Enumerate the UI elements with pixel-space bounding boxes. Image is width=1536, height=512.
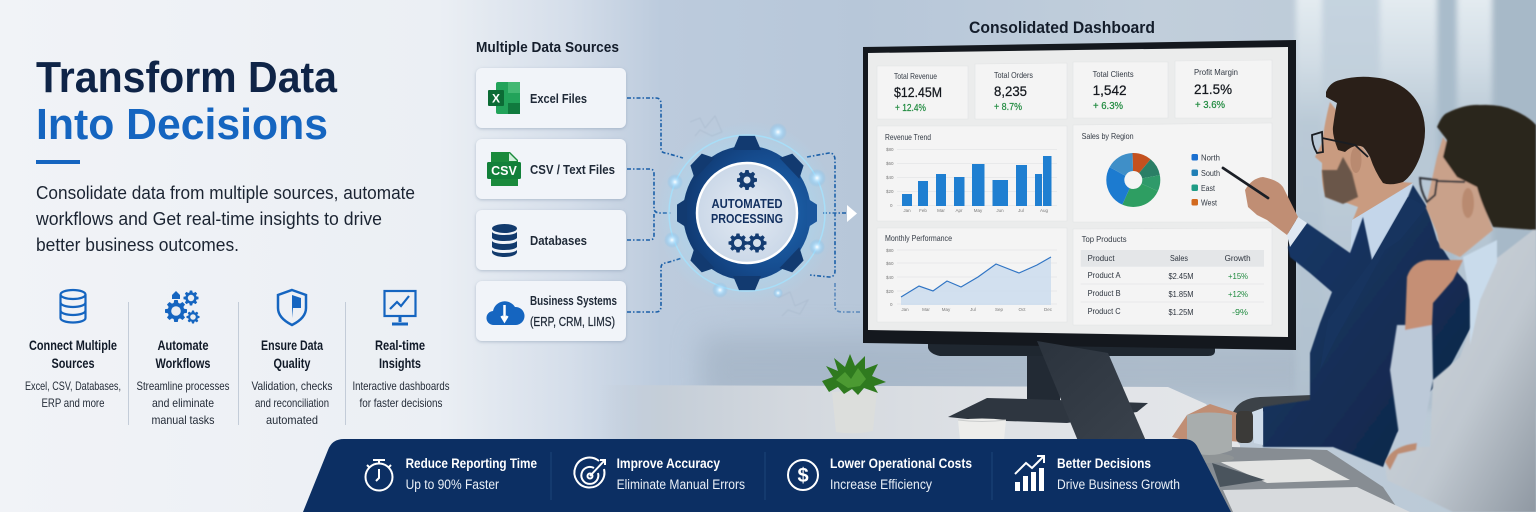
label: CSV / Text Files (530, 162, 615, 177)
coffee mug (1182, 412, 1234, 463)
ear (1350, 147, 1362, 173)
icon: database stack (492, 224, 517, 257)
main title (36, 53, 337, 149)
heading: consolidated dashboard: Consolidated Dashboard (969, 18, 1155, 37)
icon: database (60, 290, 86, 322)
benefit: better decisions: Drive Business Growth (1057, 477, 1180, 492)
feature: real-time insights (352, 291, 450, 410)
kpi: total revenue: Total Revenue (894, 71, 937, 81)
heading (261, 337, 323, 371)
benefit: better decisions: Better Decisions (1057, 455, 1151, 471)
gear label: AUTOMATED (712, 196, 782, 211)
kpi: profit margin: + 3.6% (1195, 100, 1225, 111)
bar chart: Apr (955, 208, 963, 213)
kpi: total orders: + 8.7% (994, 102, 1022, 113)
line chart: Oct (1018, 307, 1026, 312)
description: and reconciliation (255, 396, 329, 410)
heading (375, 337, 425, 371)
bar chart: Jan (903, 208, 911, 213)
description: ERP and more (42, 396, 105, 410)
title accent rule (36, 160, 80, 164)
bar chart: May (974, 208, 983, 213)
panel: business systems (476, 281, 626, 341)
benefit: improve accuracy (574, 455, 745, 492)
bar chart: Feb (919, 208, 927, 213)
chart legend (1192, 154, 1220, 208)
intro paragraph: better business outcomes. (36, 235, 239, 255)
lapel (1320, 197, 1427, 370)
icon: growth chart (1015, 456, 1044, 491)
icon: excel: X (492, 92, 500, 106)
table: Sales (1170, 254, 1188, 263)
line chart: Dec (1044, 307, 1053, 312)
description: Excel, CSV, Databases, (25, 379, 121, 393)
desk (600, 385, 1410, 512)
kpi: total clients (1073, 62, 1168, 118)
table: +12% (1228, 290, 1248, 299)
panel: sales by region: Sales by Region (1082, 131, 1134, 141)
hair (1437, 105, 1536, 230)
intro paragraph (35, 183, 415, 255)
kpi: profit margin (1175, 60, 1272, 118)
line chart: Mar (922, 307, 930, 312)
icon: shield (278, 290, 306, 325)
monitor stand (928, 343, 1215, 423)
connectors: sources to gear (627, 98, 683, 312)
icon: dollar: $ (797, 465, 809, 487)
feature: ensure data quality (252, 290, 332, 427)
description (25, 379, 121, 410)
panel: monthly performance: Monthly Performance (885, 233, 952, 243)
icon: monitor chart (384, 291, 416, 324)
table: $1.25M (1168, 308, 1194, 317)
line chart: Jul (970, 307, 976, 312)
table: Growth (1225, 254, 1251, 263)
feature: automate workflows (136, 290, 230, 427)
chart legend: South (1201, 169, 1220, 178)
gear label: PROCESSING (711, 211, 783, 226)
description: Validation, checks (252, 379, 332, 393)
icon: target (574, 458, 605, 488)
panel: revenue trend: Revenue Trend (885, 132, 931, 142)
table: Product B (1088, 289, 1121, 298)
description: Streamline processes (136, 379, 230, 393)
table: $2.45M (1168, 272, 1194, 281)
heading: Sources (52, 355, 95, 371)
description: and eliminate (152, 396, 214, 410)
heading: Automate (158, 337, 209, 353)
kpi: total orders: Total Orders (994, 70, 1033, 80)
intro paragraph: Consolidate data from multiple sources, automate (36, 183, 415, 203)
gear hub (697, 163, 797, 263)
presenter (1172, 77, 1471, 467)
chart legend: West (1201, 198, 1218, 208)
table: Product C (1088, 307, 1121, 316)
connectors: gear to dashboard (807, 153, 862, 312)
benefit: lower operational costs: Lower Operational Costs (830, 455, 972, 471)
heading (29, 337, 117, 371)
bar chart: $40 (886, 175, 894, 180)
hair (1326, 77, 1425, 184)
main title: Transform Data (36, 53, 337, 102)
laptop (1037, 341, 1146, 441)
icon: cloud download (486, 301, 525, 325)
description (352, 379, 450, 410)
table (1081, 250, 1264, 317)
icon: stopwatch (366, 460, 392, 490)
line chart: $40 (886, 275, 894, 280)
kpi: total revenue: + 12.4% (895, 103, 926, 114)
kpi: total revenue: $12.45M (894, 84, 942, 100)
monitor (863, 40, 1296, 350)
line chart: $80 (886, 248, 894, 253)
benefit: reduce reporting time: Reduce Reporting Time (406, 455, 537, 471)
kpi: total orders (975, 63, 1067, 119)
screen (868, 47, 1288, 337)
pointing hand (1245, 177, 1298, 235)
panel: sales by region (1073, 123, 1272, 222)
resting hand (1172, 404, 1242, 442)
small mug (958, 418, 1006, 440)
light flares (664, 123, 826, 298)
benefit: improve accuracy: Improve Accuracy (617, 455, 720, 471)
feature dividers (128, 302, 346, 425)
gear label (711, 196, 783, 226)
gear ring (669, 135, 825, 291)
kpi: total clients: + 6.3% (1093, 101, 1123, 112)
kpi: profit margin: Profit Margin (1194, 67, 1238, 77)
bar chart: Jun (996, 208, 1004, 213)
label: Business Systems (530, 294, 617, 308)
heading: Insights (379, 355, 421, 371)
shirt (1463, 240, 1497, 345)
description (252, 379, 332, 427)
jacket (1385, 228, 1536, 512)
wristwatch (1236, 411, 1253, 443)
shirt (1335, 183, 1413, 317)
shirt cuff (1287, 217, 1307, 247)
data wisps (690, 116, 808, 316)
description (136, 379, 230, 427)
icon: excel (488, 82, 520, 114)
chart legend: North (1201, 154, 1220, 162)
panel: monthly performance (877, 228, 1067, 322)
arrow to dashboard (847, 205, 857, 222)
sleeve (1390, 325, 1433, 447)
kpi: total revenue (877, 66, 968, 119)
icon: dollar (788, 460, 818, 490)
benefit: better decisions (1015, 455, 1180, 492)
suit (1263, 185, 1471, 467)
heading (156, 337, 211, 371)
potted plant (822, 354, 886, 433)
benefit: reduce reporting time: Up to 90% Faster (406, 477, 499, 492)
label: Databases (530, 233, 587, 248)
line chart: May (942, 307, 951, 312)
panel: excel files (476, 68, 626, 128)
main title: Into Decisions (36, 100, 328, 149)
label: Excel Files (530, 91, 587, 106)
top gear icon (737, 170, 757, 190)
bar chart: 0 (890, 203, 893, 208)
benefit: lower operational costs: Increase Efficiency (830, 477, 932, 492)
icon: gears (165, 290, 200, 324)
table: +15% (1228, 272, 1248, 281)
bezel (863, 40, 1296, 350)
gear body (677, 136, 817, 290)
bar chart: Aug (1040, 208, 1048, 213)
table: $1.85M (1168, 290, 1194, 299)
bar chart: $20 (886, 189, 894, 194)
banner dividers (551, 452, 992, 500)
heading: Workflows (156, 355, 211, 371)
kpi: profit margin: 21.5% (1194, 81, 1232, 97)
colleague (1385, 105, 1536, 512)
kpi: total orders: 8,235 (994, 83, 1027, 99)
bottom benefits banner (303, 439, 1231, 512)
panel: databases (476, 210, 626, 270)
heading: multiple data sources: Multiple Data Sources (476, 40, 619, 56)
feature: connect multiple sources (25, 290, 121, 410)
icon: csv file (487, 152, 521, 186)
kpi: total clients: 1,542 (1093, 82, 1127, 98)
gear glow (655, 121, 839, 305)
line chart: 0 (890, 302, 893, 307)
panel: top products: Top Products (1082, 234, 1127, 244)
glasses (1420, 178, 1465, 202)
line chart: Jan (901, 307, 909, 312)
line chart: $20 (886, 289, 894, 294)
chair back (1233, 395, 1312, 423)
panel: csv / text files (476, 139, 626, 199)
donut chart (1115, 162, 1151, 198)
description: Interactive dashboards (352, 379, 450, 393)
bar chart (886, 147, 1057, 213)
hand on chin (1405, 260, 1463, 330)
sleeve cuff (1252, 408, 1263, 445)
beard (1322, 157, 1358, 204)
panel: revenue trend (877, 126, 1067, 221)
icon: csv file: CSV (491, 164, 518, 178)
chart legend: East (1201, 184, 1216, 193)
bottom gear icons (728, 234, 766, 252)
table: Product (1088, 254, 1115, 263)
line chart: $60 (886, 261, 894, 266)
label (530, 294, 617, 329)
table: -9% (1232, 308, 1248, 317)
resting fingers (1385, 443, 1417, 470)
neck and face (1315, 102, 1413, 222)
intro paragraph: workflows and Get real-time insights to drive (35, 209, 382, 229)
bar chart: $60 (886, 161, 894, 166)
automated processing gear (655, 116, 839, 316)
benefit: reduce reporting time (366, 455, 537, 492)
table: Product A (1088, 271, 1121, 280)
glasses (1312, 132, 1368, 157)
bar chart: $80 (886, 147, 894, 152)
description: automated (266, 413, 318, 427)
line chart: Sep (995, 307, 1003, 312)
heading: Connect Multiple (29, 337, 117, 353)
pen (1223, 168, 1268, 198)
line chart (886, 248, 1057, 312)
benefit: lower operational costs (788, 455, 972, 492)
label: (ERP, CRM, LIMS) (530, 315, 615, 329)
panel: top products (1073, 228, 1272, 325)
description: manual tasks (152, 413, 214, 427)
bar chart: Mar (937, 208, 945, 213)
benefit: improve accuracy: Eliminate Manual Errors (617, 477, 745, 492)
face (1426, 137, 1493, 257)
description: for faster decisions (360, 396, 442, 410)
heading: Real-time (375, 337, 425, 353)
kpi: total clients: Total Clients (1093, 69, 1134, 79)
bar chart: Jul (1018, 208, 1024, 213)
heading: Quality (274, 355, 311, 371)
heading: Ensure Data (261, 337, 323, 353)
ear (1462, 188, 1474, 218)
